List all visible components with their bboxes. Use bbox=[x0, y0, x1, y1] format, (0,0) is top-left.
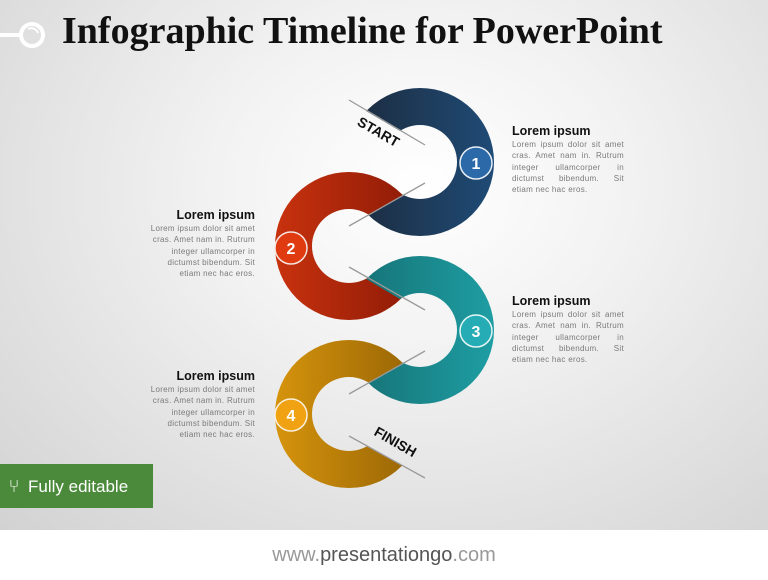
label: START: START bbox=[355, 113, 403, 150]
text block 4: etiam nec hac eros. bbox=[179, 430, 255, 439]
label: FINISH: FINISH bbox=[372, 423, 419, 460]
marker 4: 4 bbox=[287, 408, 296, 425]
marker 4 bbox=[275, 399, 307, 431]
text block 1: integer ullamcorper in bbox=[512, 163, 624, 172]
text block 2 bbox=[151, 208, 255, 278]
text block 1: cras. Amet nam in. Rutrum bbox=[512, 151, 624, 160]
ring 4 bbox=[275, 340, 402, 488]
marker 1: 1 bbox=[472, 156, 481, 173]
text block 4: integer ullamcorper in bbox=[171, 408, 255, 417]
marker 1 bbox=[460, 147, 492, 179]
text block 2: dictumst bibendum. Sit bbox=[167, 258, 255, 267]
icon: title key bbox=[0, 22, 45, 48]
text block 3: Lorem ipsum bbox=[512, 294, 590, 308]
text block 2: etiam nec hac eros. bbox=[179, 269, 255, 278]
marker 3 bbox=[460, 315, 492, 347]
chart: S-shaped timeline bbox=[274, 88, 494, 488]
text block 4 bbox=[151, 369, 255, 439]
ring 3 bbox=[366, 256, 494, 404]
text block 3: cras. Amet nam in. Rutrum bbox=[512, 321, 624, 330]
text block 4: Lorem ipsum bbox=[176, 369, 255, 383]
badge: Fully editable bbox=[0, 464, 153, 508]
text block 2: cras. Amet nam in. Rutrum bbox=[153, 235, 255, 244]
marker 2: 2 bbox=[287, 241, 296, 258]
text block 4: dictumst bibendum. Sit bbox=[167, 419, 255, 428]
text block 1: dictumst bibendum. Sit bbox=[512, 174, 624, 183]
marker 2 bbox=[275, 232, 307, 264]
text block 3: integer ullamcorper in bbox=[512, 333, 624, 342]
text block 1 bbox=[512, 124, 624, 194]
ring 2 bbox=[275, 172, 402, 320]
text block 3: Lorem ipsum dolor sit amet bbox=[512, 310, 624, 319]
title: Infographic Timeline for PowerPoint bbox=[62, 10, 663, 52]
badge: Fully editable: Fully editable bbox=[28, 477, 128, 496]
text block 1: etiam nec hac eros. bbox=[512, 185, 588, 194]
text block 2: integer ullamcorper in bbox=[171, 247, 255, 256]
text block 4: Lorem ipsum dolor sit amet bbox=[151, 385, 255, 394]
ring 1 bbox=[366, 88, 494, 236]
footer bbox=[0, 530, 768, 576]
badge: Fully editable: ⑂ bbox=[9, 476, 19, 496]
text block 3 bbox=[512, 294, 624, 364]
text block 3: dictumst bibendum. Sit bbox=[512, 344, 624, 353]
text block 2: Lorem ipsum bbox=[176, 208, 255, 222]
text block 4: cras. Amet nam in. Rutrum bbox=[153, 396, 255, 405]
text block 3: etiam nec hac eros. bbox=[512, 355, 588, 364]
text block 1: Lorem ipsum dolor sit amet bbox=[512, 140, 624, 149]
text block 1: Lorem ipsum bbox=[512, 124, 590, 138]
text block 2: Lorem ipsum dolor sit amet bbox=[151, 224, 255, 233]
marker 3: 3 bbox=[472, 324, 481, 341]
footer: www.presentationgo.com bbox=[272, 544, 496, 566]
